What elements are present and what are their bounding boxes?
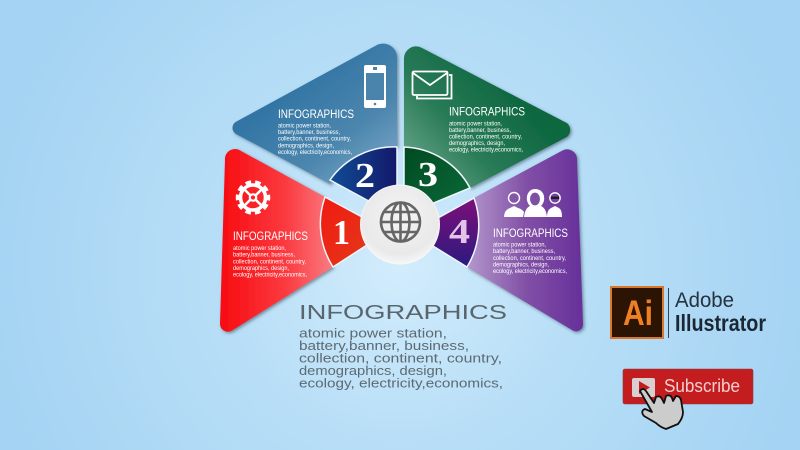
subscribe button	[623, 369, 753, 429]
right man	[547, 206, 562, 217]
text: panel 3	[449, 107, 525, 154]
text: panel 3: atomic power station,	[449, 121, 502, 128]
main text block	[299, 301, 507, 390]
wedge 2	[330, 147, 397, 206]
left man	[504, 206, 524, 217]
Adobe Illustrator logo: Adobe	[675, 289, 734, 312]
wedge 4	[433, 198, 479, 267]
text: panel 2	[278, 109, 354, 156]
Adobe Illustrator logo	[611, 287, 766, 338]
text: panel 3: collection, continent, country,	[449, 133, 522, 140]
text: panel 2: ecology, electricity,economics,	[278, 149, 352, 156]
Adobe Illustrator logo: Illustrator	[675, 310, 766, 336]
icon: envelope	[412, 72, 452, 98]
text: panel 4: battery,banner, business,	[493, 248, 555, 255]
text: panel 2: collection, continent, country,	[278, 136, 351, 143]
main text block: collection, continent, country,	[299, 352, 502, 366]
icon: hand cursor	[640, 389, 683, 429]
icon: gear	[238, 182, 268, 212]
text: panel 1: ecology, electricity,economics,	[233, 271, 307, 278]
wedge 4: 4	[449, 212, 470, 251]
text: panel 1	[233, 231, 308, 278]
panel 3: green	[404, 46, 570, 207]
text: panel 4: ecology, electricity,economics,	[493, 268, 567, 275]
wedge 1: 1	[333, 213, 350, 252]
text: panel 2: INFOGRAPHICS	[278, 109, 354, 121]
main text block: ecology, electricity,economics,	[299, 376, 503, 390]
text: panel 4: demographics, design,	[493, 262, 549, 269]
text: panel 3: battery,banner, business,	[449, 127, 511, 134]
text: panel 3: demographics, design,	[449, 140, 505, 147]
text: panel 3: INFOGRAPHICS	[449, 107, 525, 119]
text: panel 4: INFOGRAPHICS	[493, 228, 568, 240]
text: panel 1: demographics, design,	[233, 265, 289, 272]
text: panel 1: atomic power station,	[233, 245, 286, 252]
text: panel 1: INFOGRAPHICS	[233, 231, 308, 243]
icon: people	[504, 189, 562, 217]
wedge 1	[320, 197, 367, 267]
subscribe button: Subscribe	[664, 376, 740, 396]
text: panel 2: demographics, design,	[278, 142, 334, 149]
text: panel 2: battery,banner, business,	[278, 129, 340, 136]
text: panel 4: collection, continent, country,	[493, 255, 566, 262]
main text block: INFOGRAPHICS	[299, 301, 507, 324]
text: panel 1: battery,banner, business,	[233, 252, 295, 259]
text: panel 4: atomic power station,	[493, 242, 546, 249]
center circle with globe icon	[360, 185, 440, 264]
wedge 3	[404, 147, 470, 207]
wedge 3: 3	[418, 155, 438, 194]
woman	[524, 189, 547, 217]
text: panel 3: ecology, electricity,economics,	[449, 147, 523, 154]
text: panel 2: atomic power station,	[278, 122, 331, 130]
text: panel 4	[493, 228, 568, 275]
panel 1: red	[220, 149, 367, 332]
main text block: demographics, design,	[299, 364, 447, 378]
wedge 2: 2	[355, 156, 375, 195]
icon: phone	[364, 65, 386, 108]
main text block: atomic power station,	[299, 327, 447, 341]
main text block: battery,banner, business,	[299, 339, 469, 353]
panel 4: purple	[433, 149, 583, 331]
panel 2: blue	[232, 44, 397, 206]
text: panel 1: collection, continent, country,	[233, 258, 306, 265]
Adobe Illustrator logo: Ai	[623, 294, 653, 333]
